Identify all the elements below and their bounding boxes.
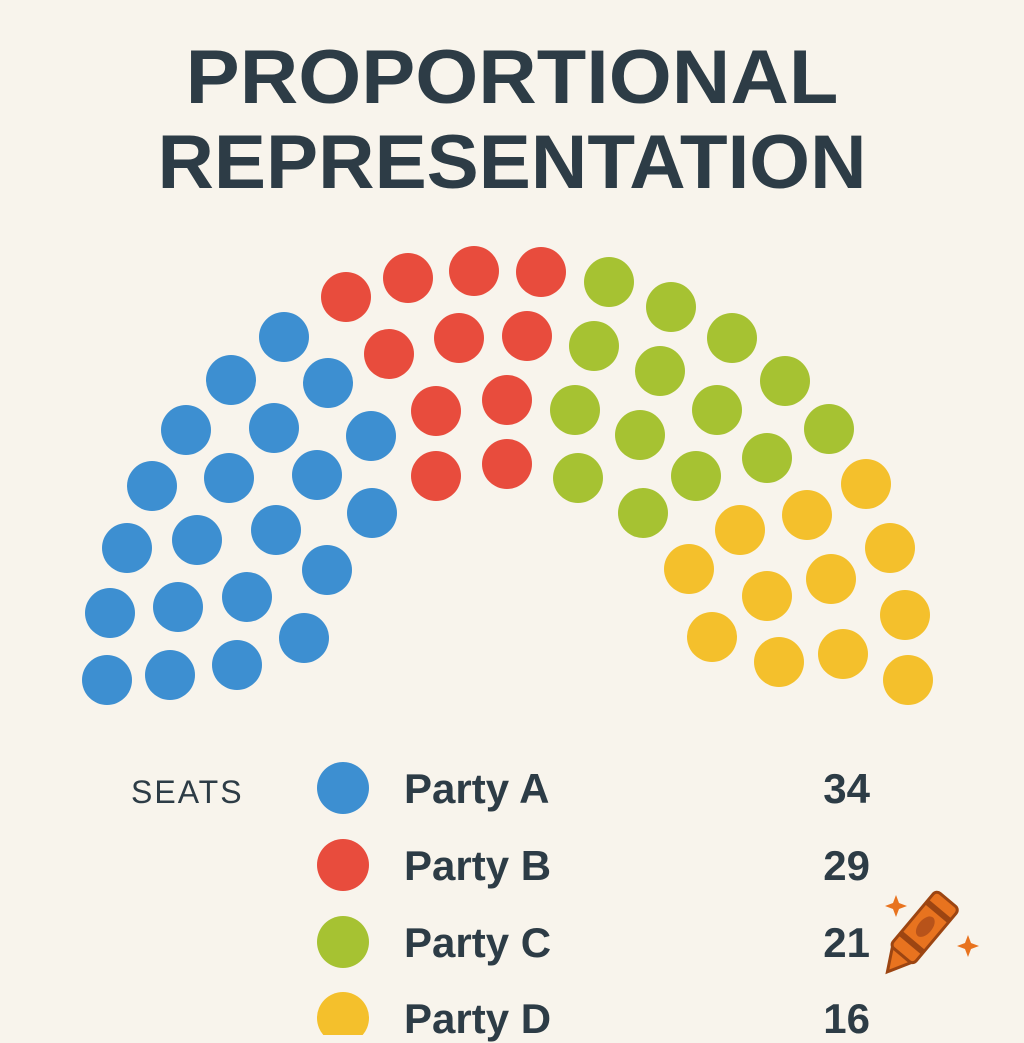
title	[158, 35, 866, 205]
title: REPRESENTATION	[158, 120, 866, 205]
legend: 21	[823, 919, 870, 966]
legend: 29	[823, 842, 870, 889]
legend: Party B	[404, 842, 551, 889]
legend: Party A	[404, 765, 550, 812]
title: PROPORTIONAL	[186, 35, 838, 120]
legend	[317, 762, 870, 1042]
legend: 34	[823, 765, 870, 812]
legend: Party D	[404, 995, 551, 1042]
legend: Party C	[404, 919, 551, 966]
chart: parliament hemicycle	[82, 246, 933, 705]
legend label: seats: SEATS	[131, 774, 244, 810]
legend: 16	[823, 995, 870, 1042]
icon: crayon	[885, 890, 979, 974]
